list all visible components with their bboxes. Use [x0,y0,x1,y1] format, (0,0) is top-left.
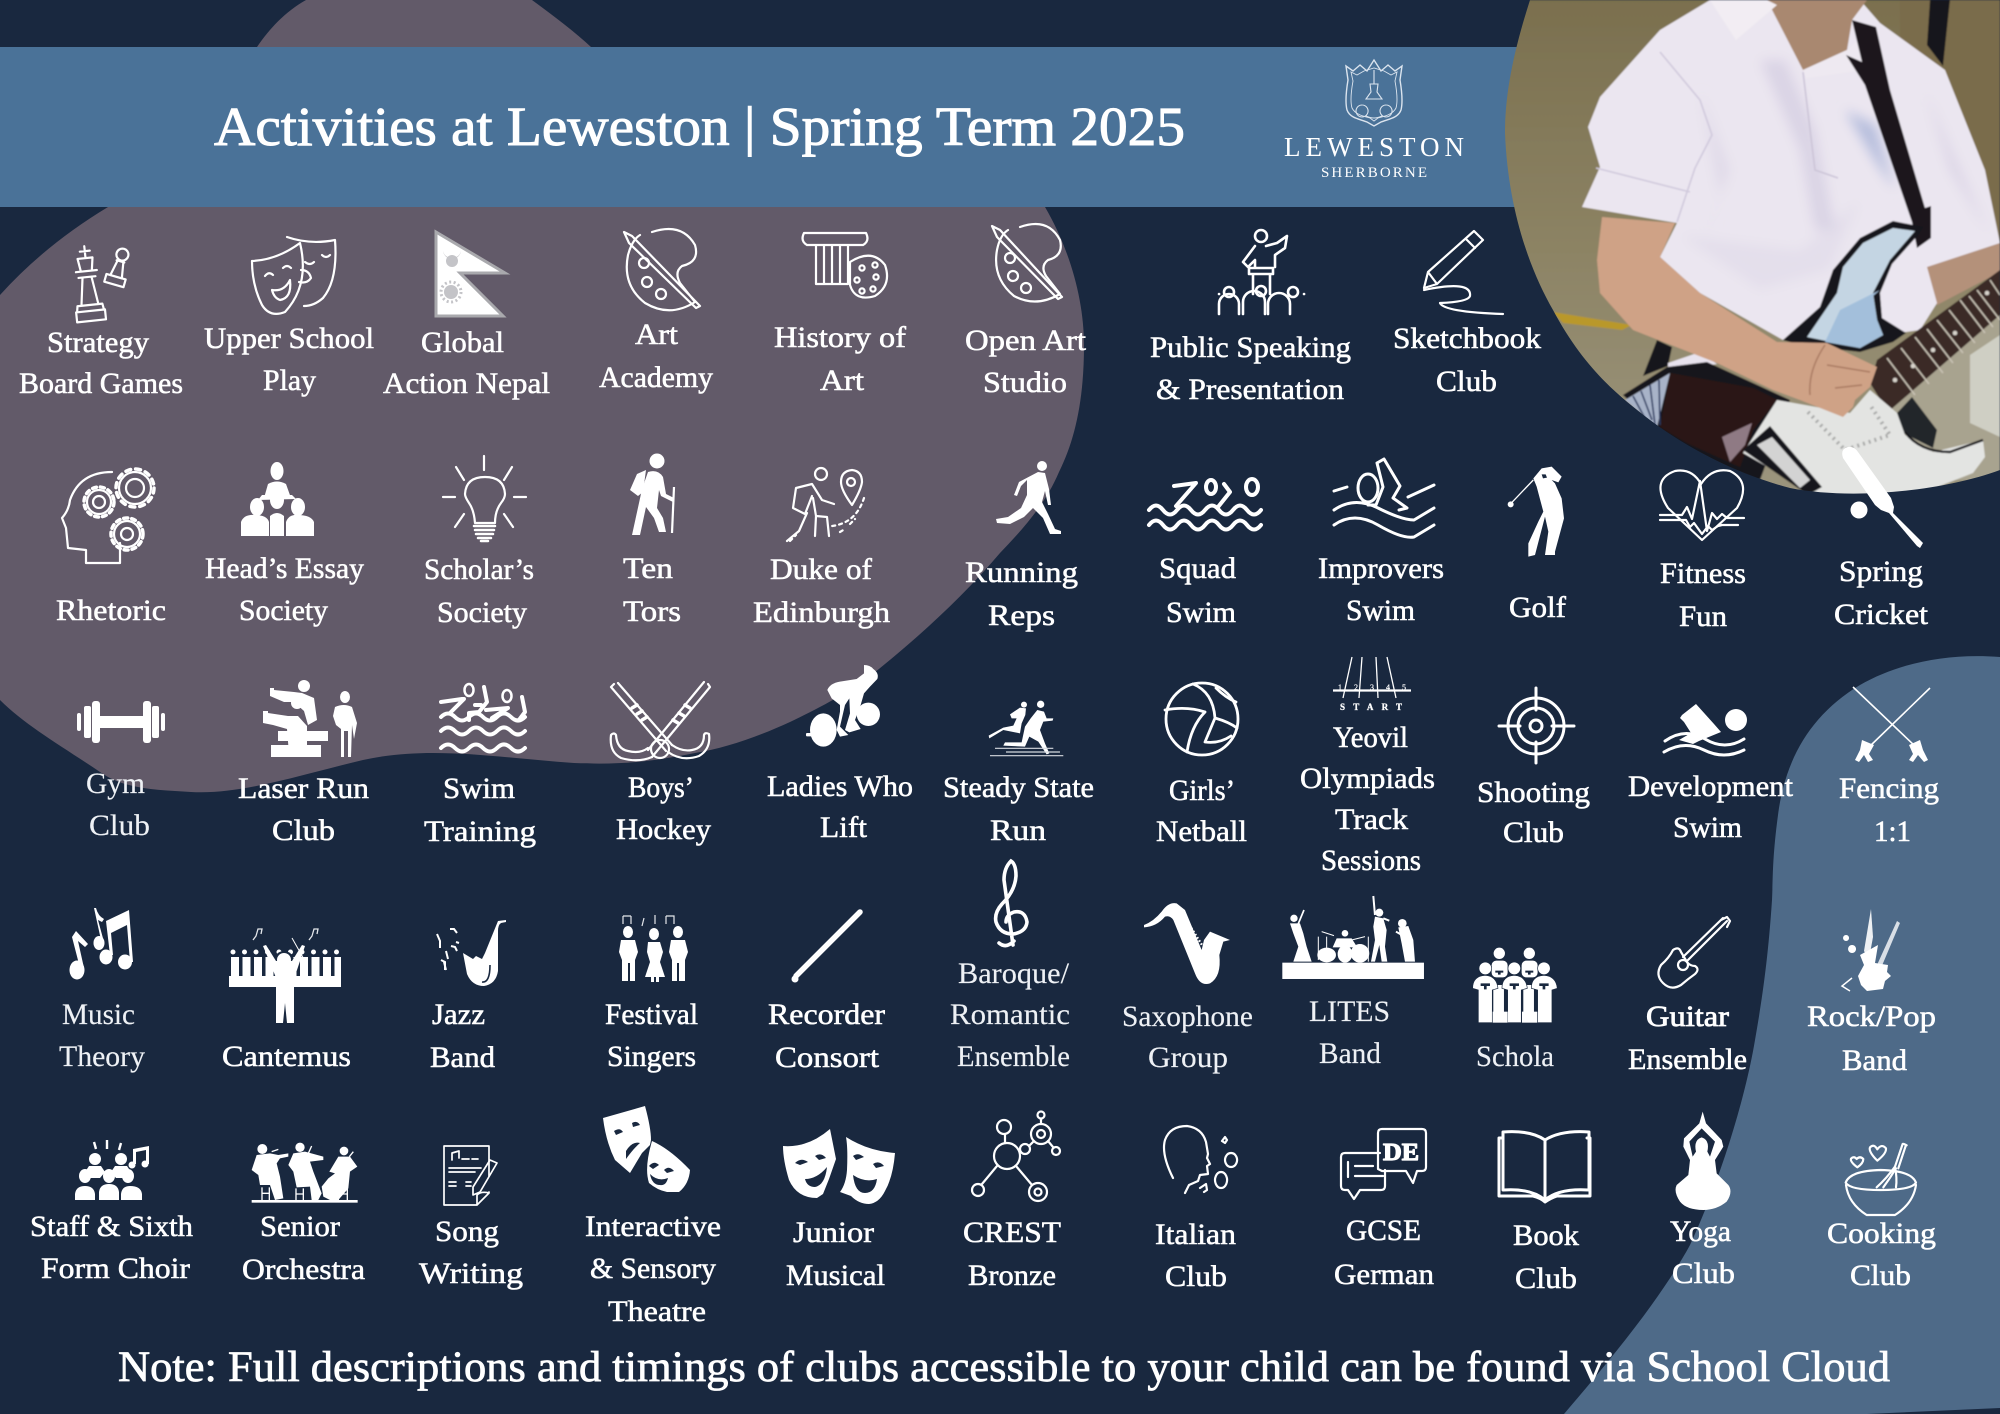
label [1150,331,1351,406]
label [383,326,550,400]
label [1477,776,1590,849]
label [1660,557,1746,633]
label: Club [1850,1259,1911,1292]
item: Festival Singers [605,915,698,1073]
icon: public speaker [1219,230,1304,314]
label [424,772,536,848]
label: Squad [1159,552,1236,585]
icon: light bulb [443,456,526,541]
label: Book [1513,1219,1579,1252]
label [1513,1219,1579,1295]
logo: Leweston Sherborne: LEWESTON [1284,132,1464,162]
label: Club [1672,1257,1735,1290]
label: Cricket [1834,598,1929,631]
item: Open Art Studio [965,224,1087,399]
icon: hiker with map pin [787,468,864,541]
icon: mixing bowl and whisk [1846,1144,1916,1215]
label: Steady State [943,771,1094,804]
label: Studio [983,366,1067,399]
icon: column and palette [803,233,887,298]
item: Senior Orchestra [242,1143,365,1286]
label [1393,322,1541,398]
item: Swim Training [424,684,536,848]
label: Singers [607,1040,696,1073]
label [965,556,1078,632]
light blue blob bottom-right [1564,656,2000,1414]
label: Festival [605,998,698,1031]
title: Activities at Leweston | Spring Term 2025 [214,96,1185,157]
label [424,553,534,629]
label [1827,1217,1936,1292]
icon: swimmer outline [1334,459,1434,537]
icon: open book [1499,1132,1590,1202]
label: Swim [443,772,515,805]
guitar neck [1870,270,2000,412]
left arm and hand [1597,217,1877,417]
label: Gym [86,767,145,800]
icon: cricket bat and ball [1842,447,1923,548]
label: Running [965,556,1078,589]
logo: Leweston Sherborne: SHERBORNE [1321,165,1427,181]
icon: molecule [972,1112,1060,1201]
label: Fitness [1660,557,1746,590]
label [1628,1000,1747,1076]
item: Shooting Club [1477,688,1590,849]
label: Club [1515,1262,1577,1295]
item: Cooking Club [1827,1144,1936,1292]
footer note: Note: Full descriptions and timings of clubs accessible to your child can be found via School Cloud [118,1344,1890,1391]
label: Edinburgh [753,596,890,629]
label: Band [1319,1037,1381,1070]
icon: speech bubbles DE: DE [1383,1140,1419,1166]
item: Boys' Hockey [611,682,711,846]
icon: orchestra silhouettes [252,1143,358,1203]
label [30,1210,193,1285]
label: Spring [1839,555,1923,588]
label [616,771,711,846]
icon: dumbbell [77,701,165,743]
label: Run [990,814,1046,847]
label: Society [437,596,527,629]
label: Fun [1679,600,1727,633]
label: Staff & Sixth [30,1210,193,1243]
label: Academy [599,361,713,394]
label: Senior [260,1210,340,1243]
upper guitar horn [1783,221,1923,352]
label [599,318,713,394]
icon: treble clef [996,861,1027,946]
icon: music notes [70,908,133,980]
icon: chess pieces [69,245,134,322]
label [786,1216,885,1292]
label: Olympiads [1300,762,1435,795]
item: Spring Cricket [1834,447,1929,631]
label: History of [774,321,906,354]
icon: target crosshair [1499,688,1574,763]
label: Club [89,809,150,842]
label: CREST [963,1216,1061,1249]
label: Swim [1673,811,1742,844]
label: GCSE [1346,1214,1421,1247]
label: Track [1335,803,1408,836]
label: Rhetoric [56,594,166,627]
icon: swimmers and waves [441,684,525,752]
label: 1:1 [1874,815,1911,848]
item: LITES Band [1282,896,1424,1070]
label [59,998,145,1073]
icon: pencil and squiggle [1424,231,1503,314]
label [430,998,495,1074]
icon: volleyball [1165,683,1238,755]
label: Yeovil [1333,721,1408,754]
item: Sketchbook Club [1393,231,1541,398]
icon: choir group [1473,948,1557,1023]
label: Shooting [1477,776,1590,809]
label: Laser Run [238,772,369,805]
label: Club [1436,365,1497,398]
label: Ensemble [957,1040,1070,1073]
icon: choir and conductor [229,929,341,1023]
label [205,552,364,627]
title banner [0,47,1530,207]
item: Rhetoric [56,469,166,627]
item: Golf [1508,467,1566,624]
item: Ladies Who Lift [767,665,913,844]
label [1300,721,1435,877]
icon: weightlifter [806,665,880,747]
icon: acoustic guitar [1658,917,1730,988]
lower body [1623,362,1790,480]
item: Development Swim [1628,704,1794,844]
label: Musical [786,1259,885,1292]
label [238,772,369,847]
label [1839,772,1939,848]
icon: artist palette [624,229,700,310]
item: Public Speaking & Presentation [1150,230,1351,406]
label [753,553,890,629]
item: Rock/Pop Band [1807,909,1936,1077]
label: Recorder [768,998,885,1031]
label: Bronze [968,1259,1056,1292]
label: Saxophone [1122,1000,1253,1033]
label: Yoga [1670,1215,1731,1248]
icon: electric guitar burst [1842,909,1900,991]
label: Theatre [608,1295,706,1328]
icon: speech bubbles DE [1341,1129,1426,1199]
label: Global [421,326,504,359]
label: Sessions [1321,844,1421,877]
label [1159,552,1236,629]
label: Schola [1476,1040,1554,1073]
label: Band [1842,1044,1907,1077]
label [623,552,681,628]
item: Strategy Board Games [19,245,183,400]
label [419,1215,523,1290]
label: Netball [1156,815,1247,848]
label: Jazz [432,998,485,1031]
icon: crossed hockey sticks [611,682,710,760]
label: Girls’ [1169,774,1235,807]
label [963,1216,1061,1292]
icon: theatre masks outline [252,237,336,314]
label: Society [239,594,328,627]
label: Rock/Pop [1807,1000,1936,1033]
item: Yoga Club [1670,1112,1735,1290]
label [1670,1215,1735,1290]
item: Saxophone Group [1122,903,1253,1074]
item: Book Club [1499,1132,1590,1295]
icon: heart with pulse [1660,470,1744,540]
item: History of Art [774,233,906,397]
label: Art [635,318,679,351]
item: Art Academy [599,229,713,394]
label: Ten [623,552,673,585]
icon: yoga pose [1676,1112,1730,1210]
label: Public Speaking [1150,331,1351,364]
label: Romantic [950,998,1070,1031]
label [950,957,1070,1073]
icon: head with gears [62,469,154,563]
icon: swimmer silhouette [1664,704,1747,755]
label: Play [263,364,316,397]
label [774,321,906,397]
label: Club [1165,1260,1227,1293]
icon: group of people [241,462,314,536]
label: Swim [1346,594,1415,627]
icon: swimmer in waves [1149,479,1261,530]
item: CREST Bronze [963,1112,1061,1292]
label: Boys’ [628,771,694,804]
label: Theory [59,1040,145,1073]
label [1155,1218,1236,1293]
neck and collar [1767,0,1867,70]
label: Reps [988,599,1055,632]
photo: student playing electric guitar [1500,0,2000,500]
label [242,1210,365,1286]
label: Board Games [19,367,183,400]
label: Club [272,814,335,847]
label: Sketchbook [1393,322,1541,355]
item: Schola [1473,948,1557,1073]
item: Cantemus [222,929,351,1073]
label [1628,770,1794,844]
item: Gym Club [77,701,165,842]
label: Cantemus [222,1040,351,1073]
item: Ten Tors [623,454,681,628]
label: Open Art [965,324,1087,357]
item: Improvers Swim [1318,459,1444,627]
label: Form Choir [41,1252,190,1285]
label: Interactive [585,1210,721,1243]
item: Guitar Ensemble [1628,917,1747,1076]
item: Yeovil Olympiads Track Sessions [1300,657,1435,877]
icon: saxophone with notes [437,920,506,986]
label: Hockey [616,813,711,846]
item: Scholar's Society [424,456,534,629]
label [585,1210,721,1328]
item: Fencing 1:1 [1839,687,1939,848]
item: Baroque/Romantic Ensemble [950,861,1070,1073]
label: Fencing [1839,772,1939,805]
label: Ensemble [1628,1043,1747,1076]
item: Interactive & Sensory Theatre [585,1106,721,1328]
label: & Sensory [590,1252,716,1285]
label: LITES [1309,995,1390,1028]
label: Action Nepal [383,367,550,400]
item: Running Reps [965,461,1078,632]
item: GCSE German [1334,1129,1434,1291]
label: Art [820,364,865,397]
label: Baroque/ [958,957,1070,990]
label: Guitar [1646,1000,1729,1033]
label: Tors [623,595,681,628]
icon: head speaking [1164,1126,1237,1193]
label: Lift [820,811,868,844]
label [965,324,1087,399]
label: Training [424,815,536,848]
label: Strategy [47,326,149,359]
label: Head’s Essay [205,552,364,585]
icon: running track start: 1 2 3 4 5 [1338,683,1406,692]
icon: choir with music note [75,1140,149,1200]
item: Staff & Sixth Form Choir [30,1140,193,1285]
item: Girls' Netball [1156,683,1247,848]
label [943,771,1094,847]
icon: golfer [1508,467,1564,557]
label: Song [435,1215,499,1248]
item: Global Action Nepal [383,232,550,400]
item: Song Writing [419,1146,523,1290]
item: Head's Essay Society [205,462,364,627]
item: Duke of Edinburgh [753,468,890,629]
icon: Nepal flag [436,232,505,316]
label: Ladies Who [767,770,913,803]
item: Recorder Consort [768,912,885,1074]
logo: Leweston Sherborne [1284,60,1464,181]
label: Orchestra [242,1253,365,1286]
label [86,767,150,842]
label [767,770,913,844]
icon: recorder [792,912,860,982]
label: Writing [419,1257,523,1290]
item: Squad Swim [1149,479,1261,629]
label [1309,995,1390,1070]
label [1334,1214,1434,1291]
icon: three singers [619,915,688,982]
label: Swim [1166,596,1236,629]
icon: runner [996,461,1061,534]
label: Band [430,1041,495,1074]
item: Junior Musical [783,1129,895,1292]
label: & Presentation [1156,373,1344,406]
label [1318,552,1444,627]
icon: music sheet and pen [444,1146,497,1205]
label: Golf [1509,591,1566,624]
icon: filled theatre masks [603,1106,690,1192]
label: Music [62,998,135,1031]
label [605,998,698,1073]
icon: running track start [1333,657,1411,712]
label [1156,774,1247,848]
icon: running track start: START [1340,702,1402,712]
label: Development [1628,770,1794,803]
icon: crossed foils [1853,687,1930,762]
label: Cooking [1827,1217,1936,1250]
item: Jazz Band [430,920,506,1074]
label: Upper School [204,322,374,355]
label: Improvers [1318,552,1444,585]
label [1122,1000,1253,1074]
label: Club [1503,816,1564,849]
label [1807,1000,1936,1077]
label [768,998,885,1074]
icon: saxophone [1144,903,1230,984]
item: Steady State Run [943,701,1094,847]
icon: band on stage [1282,896,1424,979]
item: Upper School Play [204,237,374,397]
label: Group [1148,1041,1228,1074]
label: Italian [1155,1218,1236,1251]
label: Junior [793,1216,874,1249]
strap [1846,20,1931,248]
label [1834,555,1929,631]
label: Scholar’s [424,553,534,586]
icon: two runners [989,701,1063,756]
icon: filled comedy and tragedy masks [783,1129,895,1204]
label [204,322,374,397]
label: German [1334,1258,1434,1291]
purple blob top-left [0,0,1084,792]
item: Laser Run Club [238,680,369,847]
item: Music Theory [59,908,145,1073]
label: Consort [775,1041,880,1074]
icon: laser shooters [263,680,357,757]
item: Fitness Fun [1660,470,1746,633]
icon: hiker [630,454,674,535]
item: Italian Club [1155,1126,1237,1293]
label [19,326,183,400]
icon: artist palette [992,224,1062,302]
label: Duke of [770,553,872,586]
